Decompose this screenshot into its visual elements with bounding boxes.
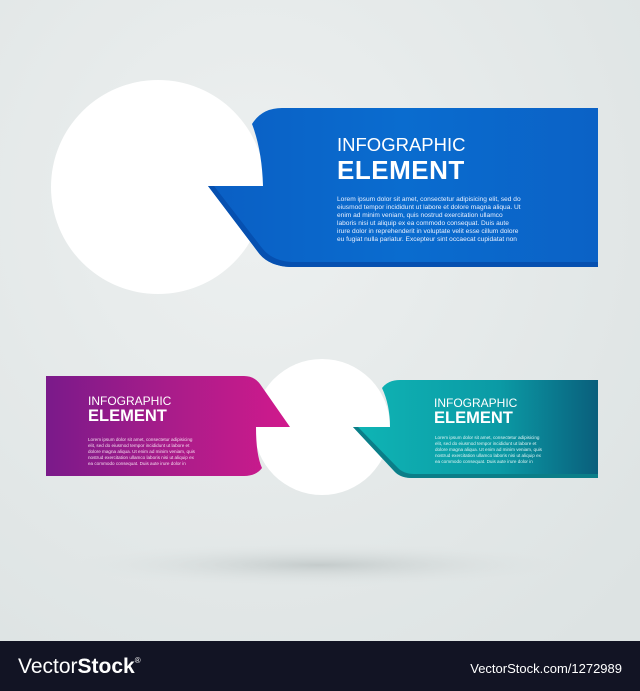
small circle — [254, 359, 390, 495]
panel: teal banner: ELEMENT — [434, 409, 513, 427]
heading: INFOGRAPHIC — [337, 134, 465, 155]
panel: teal banner: elit, sed do eiusmod tempor incididunt ut labore et — [435, 441, 537, 446]
panel: blue banner: ELEMENT — [337, 155, 465, 185]
panel: purple banner: ELEMENT — [88, 407, 167, 425]
footer: VectorStock — [18, 655, 135, 678]
text block: enim ad minim veniam, quis nostrud exercitation ullamco — [337, 212, 503, 219]
floor shadow — [60, 543, 580, 587]
panel: purple banner: Lorem ipsum dolor sit amet, consectetur adipisicing — [88, 437, 193, 442]
panel: teal banner: dolore magna aliqua. Ut enim ad minim veniam, quis — [435, 447, 543, 452]
text block: irure dolor in reprehenderit in voluptate velit esse cillum dolore — [337, 228, 519, 235]
text block: eu fugiat nulla pariatur. Excepteur sint occaecat cupidatat non — [337, 236, 517, 243]
panel: teal banner: ea commodo consequat. Duis aute irure dolor in — [435, 459, 533, 464]
footer: VectorStock.com/1272989 — [470, 661, 622, 676]
panel: blue banner — [208, 108, 598, 267]
footer — [0, 641, 640, 691]
text block: eiusmod tempor incididunt ut labore et dolore magna aliqua. Ut — [337, 204, 521, 211]
text block — [337, 196, 521, 243]
panel: purple banner: INFOGRAPHIC — [88, 394, 172, 408]
panel: teal banner: Lorem ipsum dolor sit amet, consectetur adipisicing — [435, 435, 540, 440]
panel: purple banner: elit, sed do eiusmod tempor incididunt ut labore et — [88, 443, 190, 448]
text block: laboris nisi ut aliquip ex ea commodo consequat. Duis aute — [337, 220, 509, 227]
big circle — [51, 80, 265, 294]
panel: teal banner — [353, 380, 598, 478]
panel: teal banner: INFOGRAPHIC — [434, 396, 518, 410]
footer: ® — [135, 656, 141, 665]
panel: purple banner: ea commodo consequat. Duis aute irure dolor in — [88, 461, 186, 466]
panel: purple banner: nostrud exercitation ullamco laboris nisi ut aliquip ex — [88, 455, 195, 460]
text block: Lorem ipsum dolor sit amet, consectetur adipisicing elit, sed do — [337, 196, 521, 203]
panel: purple banner — [46, 376, 290, 476]
panel: purple banner: dolore magna aliqua. Ut enim ad minim veniam, quis — [88, 449, 196, 454]
panel: teal banner: nostrud exercitation ullamco laboris nisi ut aliquip ex — [435, 453, 542, 458]
